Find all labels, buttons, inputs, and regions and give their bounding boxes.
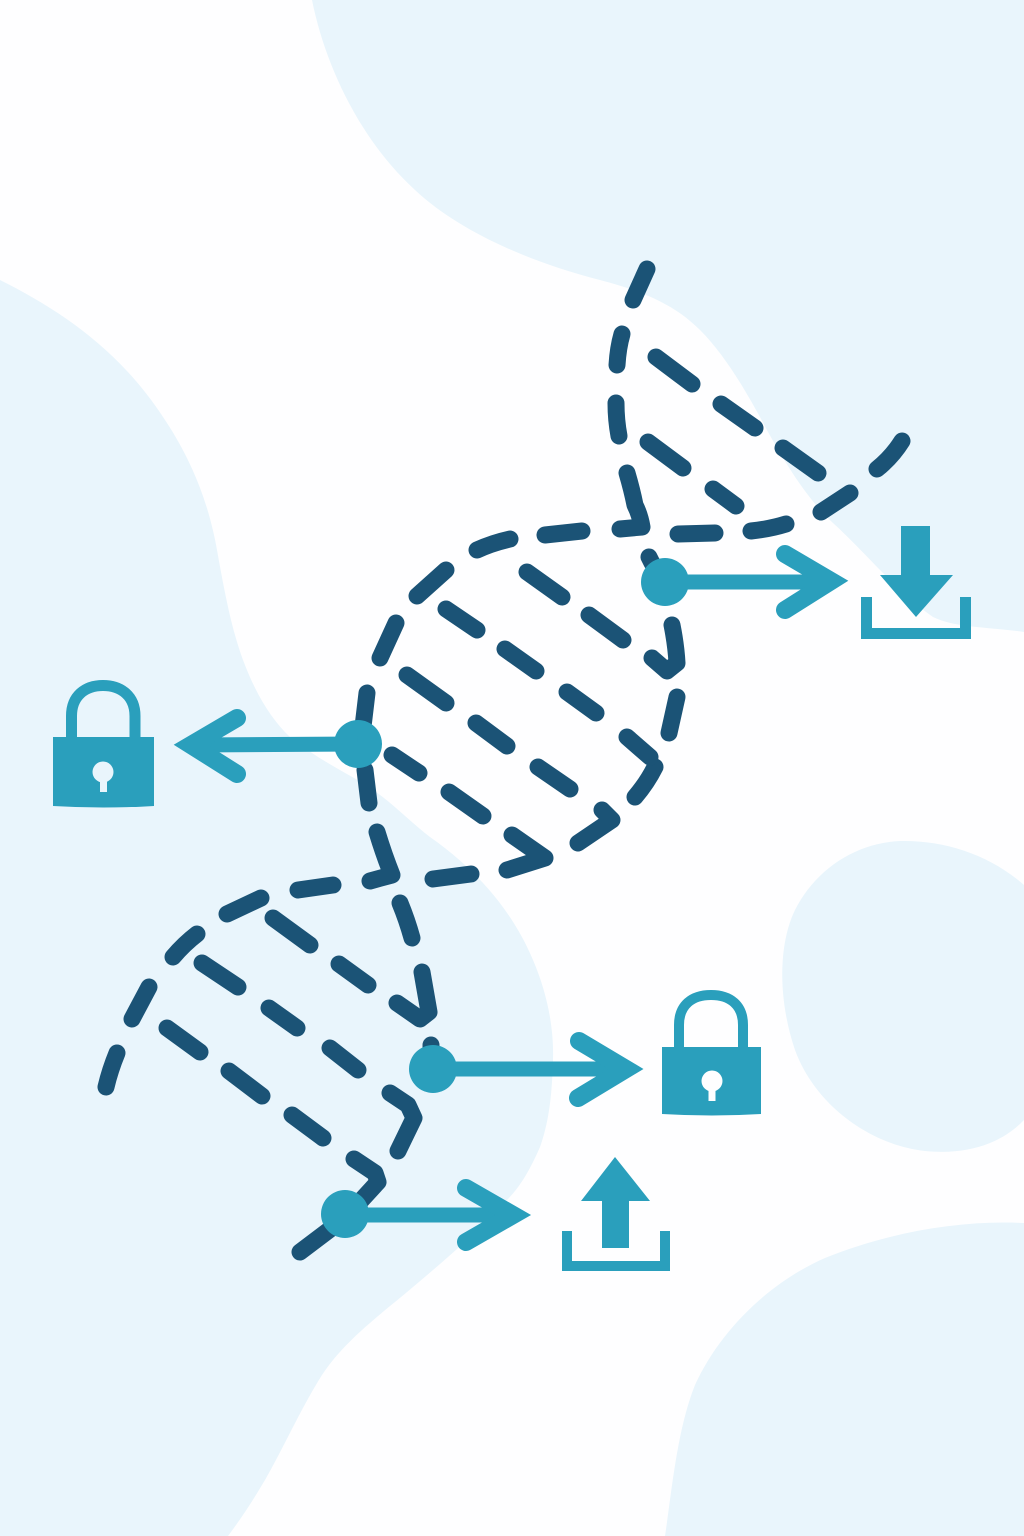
blob: left [0, 280, 553, 1536]
blob: top right [312, 0, 1024, 632]
blob: bottom right [665, 1223, 1024, 1536]
arrow: upper node to download [641, 554, 831, 610]
blob: right middle [782, 841, 1024, 1152]
strand segments: lower helix [106, 885, 431, 1252]
arrow: lower node to lock [409, 1041, 626, 1098]
arrow: bottom node to upload [321, 1188, 513, 1242]
rungs: middle helix [392, 572, 650, 816]
icon: left lock [53, 686, 154, 808]
arrow: left node to lock [191, 718, 382, 774]
rungs: upper helix [648, 357, 818, 506]
icon: download [861, 526, 971, 639]
icon: upload [562, 1157, 670, 1271]
dna double helix [106, 269, 902, 1252]
icon: right lock [662, 995, 761, 1116]
strand segments: upper helix [616, 269, 902, 534]
rungs: lower helix [167, 918, 368, 1138]
strand segments: middle helix [362, 531, 677, 881]
